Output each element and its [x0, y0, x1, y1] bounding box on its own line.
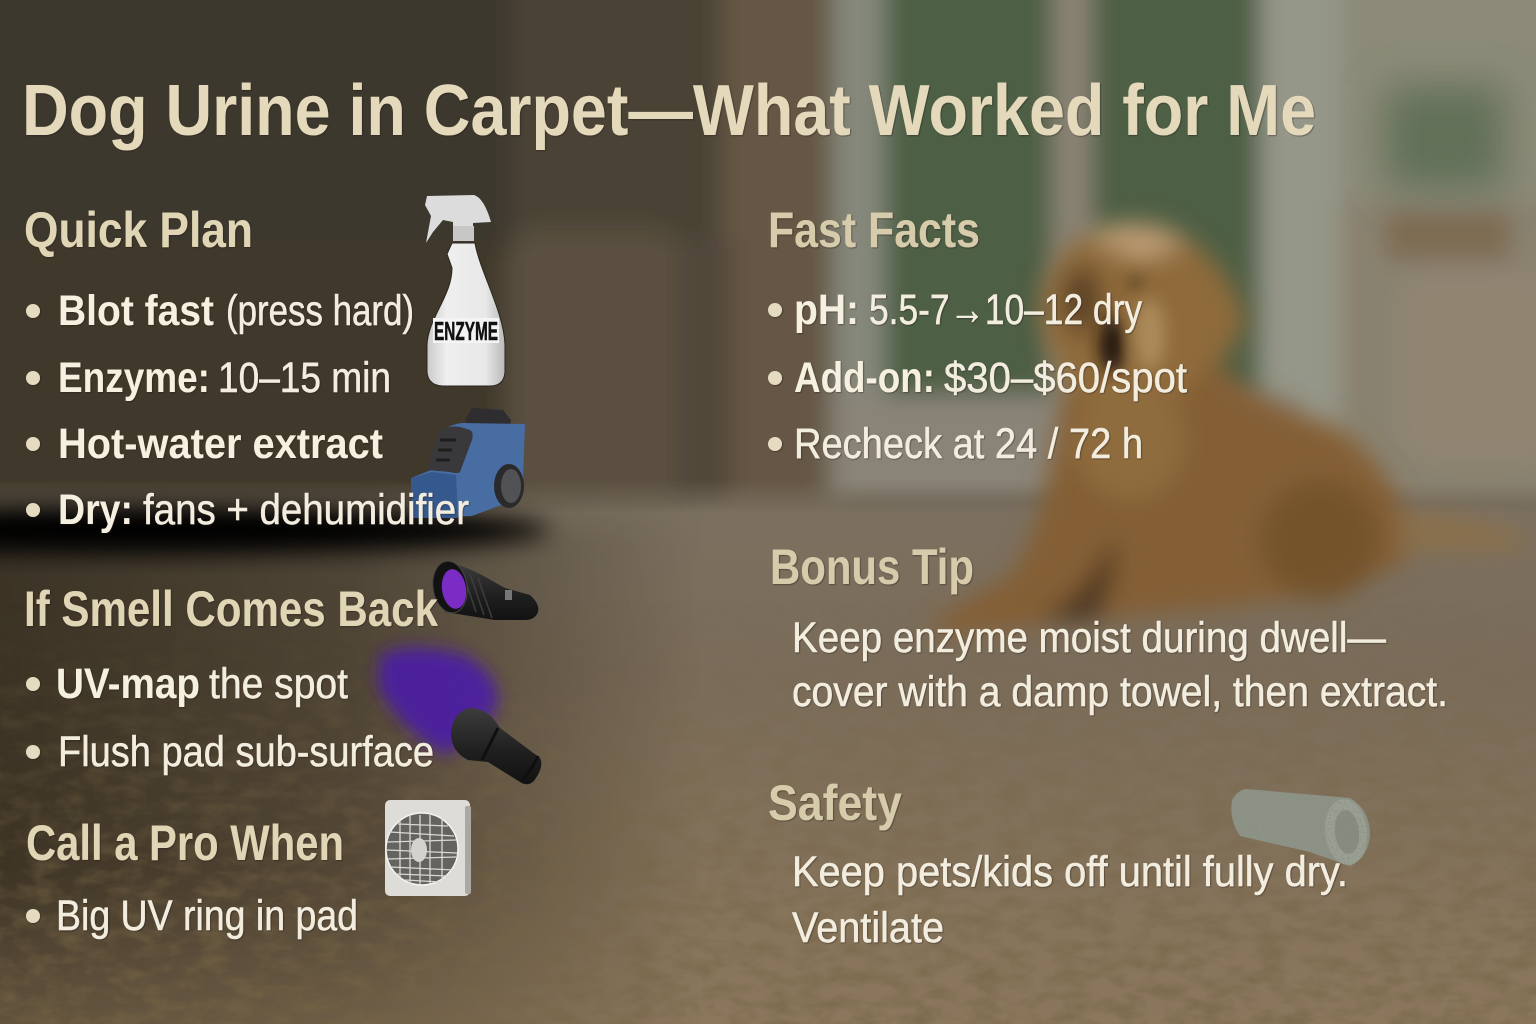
panel: safety: [768, 775, 1348, 952]
bullet: big uv ring: Big UV ring in pad: [56, 892, 358, 940]
icon: uv light glow: [378, 648, 498, 755]
icon: enzyme spray bottle: [425, 195, 505, 386]
text: safety body: Ventilate: [792, 904, 944, 952]
heading: quick plan: Quick Plan: [24, 202, 253, 258]
text: safety body: [792, 848, 1348, 952]
bullet: add-on: [768, 354, 1187, 402]
bullet: enzyme: [26, 354, 391, 402]
bullet: dry: [26, 486, 469, 534]
icon: uv flashlight lower: [451, 708, 541, 784]
bullet: add-on: $30–$60/spot: [944, 354, 1187, 402]
title: Dog Urine in Carpet—What Worked for Me: [22, 71, 1316, 151]
bullet: blot fast: (press hard): [226, 287, 414, 335]
bullet: blot fast: Blot fast: [58, 287, 214, 335]
icon: rolled carpet pad: [1231, 789, 1370, 867]
text: safety body: Keep pets/kids off until fully dry.: [792, 848, 1348, 896]
text: bonus tip body: cover with a damp towel, then extract.: [792, 668, 1448, 716]
bullet: blot fast: [26, 287, 414, 335]
heading: fast facts: Fast Facts: [768, 202, 980, 258]
bullet: add-on: Add-on:: [794, 354, 935, 402]
icon: uv flashlight upper: [430, 559, 538, 620]
text: bonus tip body: Keep enzyme moist during dwell—: [792, 614, 1386, 662]
heading: safety: Safety: [768, 775, 902, 831]
heading: call a pro when: Call a Pro When: [26, 815, 344, 871]
panel: quick plan: [24, 202, 469, 534]
icon: enzyme spray bottle: ENZYME: [434, 316, 498, 346]
heading: bonus tip: Bonus Tip: [770, 539, 974, 595]
text: bonus tip body: [792, 614, 1448, 716]
bullet: enzyme: 10–15 min: [218, 354, 391, 402]
heading: if smell comes back: If Smell Comes Back: [24, 581, 438, 637]
bullet: uv-map: UV-map: [56, 660, 200, 708]
icon: blue carpet extractor: [411, 408, 525, 518]
bullet: dry: Dry:: [58, 486, 133, 534]
bullet: uv-map: [26, 660, 348, 708]
panel: call a pro when: [26, 815, 358, 940]
panel: fast facts: [768, 202, 1187, 468]
bullet: flush pad: Flush pad sub-surface: [58, 728, 434, 776]
panel: bonus tip: [770, 539, 1448, 716]
bullet: ph: [768, 286, 1142, 334]
icon: box fan: [385, 800, 471, 896]
bullet: hot-water extract: Hot-water extract: [58, 420, 383, 468]
bullet: recheck: Recheck at 24 / 72 h: [794, 420, 1143, 468]
bullet: ph: pH:: [794, 286, 859, 334]
panel: if smell comes back: [24, 581, 438, 776]
bullet: uv-map: the spot: [209, 660, 348, 708]
bullet: enzyme: Enzyme:: [58, 354, 210, 402]
bullet: dry: fans + dehumidifier: [143, 486, 469, 534]
bullet: ph: 5.5-7→10–12 dry: [869, 286, 1142, 334]
